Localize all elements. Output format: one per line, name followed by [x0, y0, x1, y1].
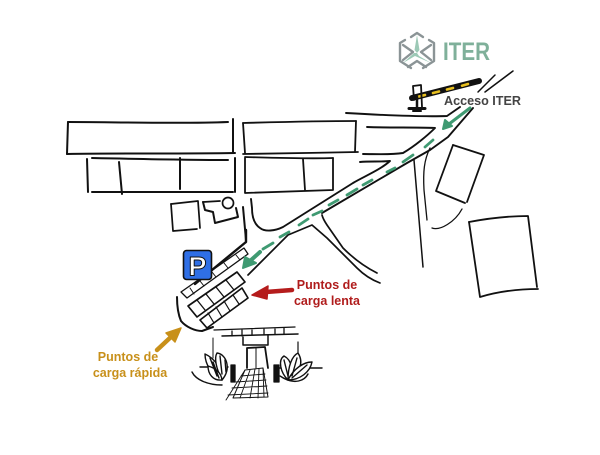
buildings: centre block	[243, 121, 358, 193]
buildings: left block	[67, 119, 235, 194]
logo: ITER: ITER	[443, 38, 490, 66]
logo: ITER	[400, 33, 490, 68]
buildings: right	[436, 145, 538, 297]
label: Puntos de carga lenta: carga lenta	[294, 294, 361, 308]
arrow: route from access	[243, 108, 470, 268]
label: Puntos de carga rápida: carga rápida	[93, 366, 168, 380]
label: Puntos de carga rápida: Puntos de	[98, 350, 158, 364]
icon: access barrier	[409, 81, 479, 111]
small buildings	[171, 198, 238, 231]
arrow: fast charging	[157, 328, 181, 350]
right bush	[275, 342, 322, 381]
left bush	[192, 338, 228, 385]
roads	[243, 71, 513, 283]
entrance building	[192, 327, 322, 400]
icon: parking sign: P	[188, 252, 207, 282]
arrow: slow charging	[252, 286, 292, 299]
parking lot	[177, 230, 248, 331]
label: Acceso ITER: Acceso ITER	[444, 94, 521, 108]
label: Puntos de carga lenta: Puntos de	[297, 278, 357, 292]
icon: parking sign	[184, 250, 212, 282]
